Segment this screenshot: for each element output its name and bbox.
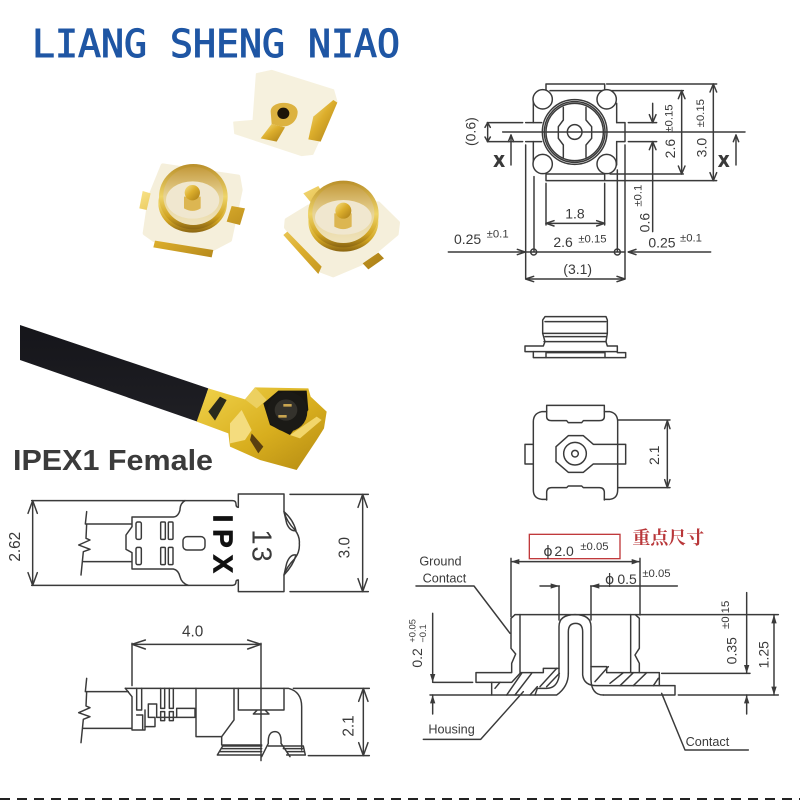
dimension and marking text bbox=[7, 515, 353, 580]
dimension labels: (3.1) bbox=[563, 261, 592, 277]
dimension and marking text: 3.0 bbox=[336, 537, 353, 558]
callout: key dimensions note: 重点尺寸 bbox=[632, 528, 704, 548]
dimension labels: 0.35 bbox=[724, 637, 740, 664]
dimension labels: ϕ bbox=[605, 572, 614, 588]
drawing: side view of receptacle bbox=[525, 317, 626, 358]
dimension labels: Contact bbox=[423, 572, 467, 586]
dimension labels: ±0.15 bbox=[695, 99, 707, 127]
dimension labels: 0.25 bbox=[648, 235, 676, 251]
dimension labels: 4.0 bbox=[182, 624, 203, 641]
dimension labels: +0.05 bbox=[408, 619, 418, 643]
dimension labels: Ground bbox=[419, 555, 462, 569]
dimension labels: ±0.15 bbox=[663, 104, 675, 133]
dimension labels: 1.25 bbox=[755, 641, 771, 668]
dimension labels: ϕ bbox=[543, 544, 553, 560]
dimension labels: ±0.1 bbox=[680, 232, 702, 244]
drawing: plug side view bbox=[79, 624, 369, 761]
drawing: plug top view bbox=[7, 494, 368, 592]
dimension and marking text: 2.62 bbox=[7, 532, 24, 562]
dimension labels: 1.8 bbox=[565, 205, 585, 221]
dimension labels: ±0.05 bbox=[580, 541, 609, 553]
dimension labels: 2.1 bbox=[340, 715, 357, 737]
title: brand name: LIANG SHENG NIAO bbox=[32, 22, 400, 66]
dimension and marking text: IPX bbox=[207, 515, 238, 580]
dimension labels: 2.0 bbox=[554, 543, 574, 559]
dimension labels: 0.25 bbox=[454, 231, 481, 247]
arrowheads bbox=[430, 559, 777, 703]
body outline bbox=[448, 84, 745, 279]
dimension labels: ±0.05 bbox=[642, 568, 671, 580]
photo: three connectors bbox=[139, 71, 398, 275]
arrowheads bbox=[28, 494, 367, 592]
dimension labels bbox=[182, 624, 357, 737]
photo: cable with IPEX plug bbox=[20, 325, 327, 470]
dimension labels bbox=[454, 99, 730, 277]
dimension labels: 0.2 bbox=[409, 648, 425, 668]
dimension labels: 0.6 bbox=[636, 213, 652, 232]
arrowheads bbox=[359, 688, 368, 756]
plug bbox=[197, 387, 327, 470]
outline bbox=[525, 405, 670, 500]
dimension value: 2.1 bbox=[646, 445, 662, 465]
dimension labels: X bbox=[494, 154, 505, 171]
dimension labels: Contact bbox=[686, 735, 730, 749]
dimension and marking text: 13 bbox=[247, 529, 278, 564]
dimension labels: −0.1 bbox=[418, 624, 428, 643]
dimension labels: 2.6 bbox=[553, 234, 573, 250]
photo: connector right bbox=[283, 181, 398, 275]
dimension labels bbox=[408, 541, 771, 749]
label: IPEX1 Female: IPEX1 Female bbox=[13, 445, 213, 477]
dimension labels: X bbox=[719, 154, 730, 171]
drawing: bottom view of receptacle bbox=[525, 405, 670, 500]
arrowheads bbox=[485, 84, 739, 282]
dimension labels: Housing bbox=[428, 723, 475, 737]
cable bbox=[20, 325, 208, 422]
dimension labels: ±0.15 bbox=[720, 601, 732, 629]
photo: connector left bbox=[139, 164, 245, 257]
plug outline bbox=[32, 494, 368, 592]
side outline bbox=[79, 640, 369, 761]
section outline bbox=[416, 558, 778, 750]
dimension labels: 2.6 bbox=[662, 139, 678, 158]
drawing: top view of receptacle bbox=[448, 84, 745, 282]
dimension labels: ±0.1 bbox=[633, 185, 645, 207]
drawing: cross-section of receptacle bbox=[408, 528, 778, 750]
photo: connector underside bbox=[234, 71, 337, 155]
dimension labels: 0.5 bbox=[617, 571, 637, 587]
dimension labels: ±0.15 bbox=[578, 234, 607, 246]
bottom dashed rule bbox=[0, 798, 800, 800]
dimension labels: 3.0 bbox=[694, 138, 710, 157]
dimension labels: ±0.1 bbox=[487, 228, 509, 240]
dimension labels: (0.6) bbox=[462, 117, 478, 146]
callout: key dimension box bbox=[529, 534, 620, 559]
